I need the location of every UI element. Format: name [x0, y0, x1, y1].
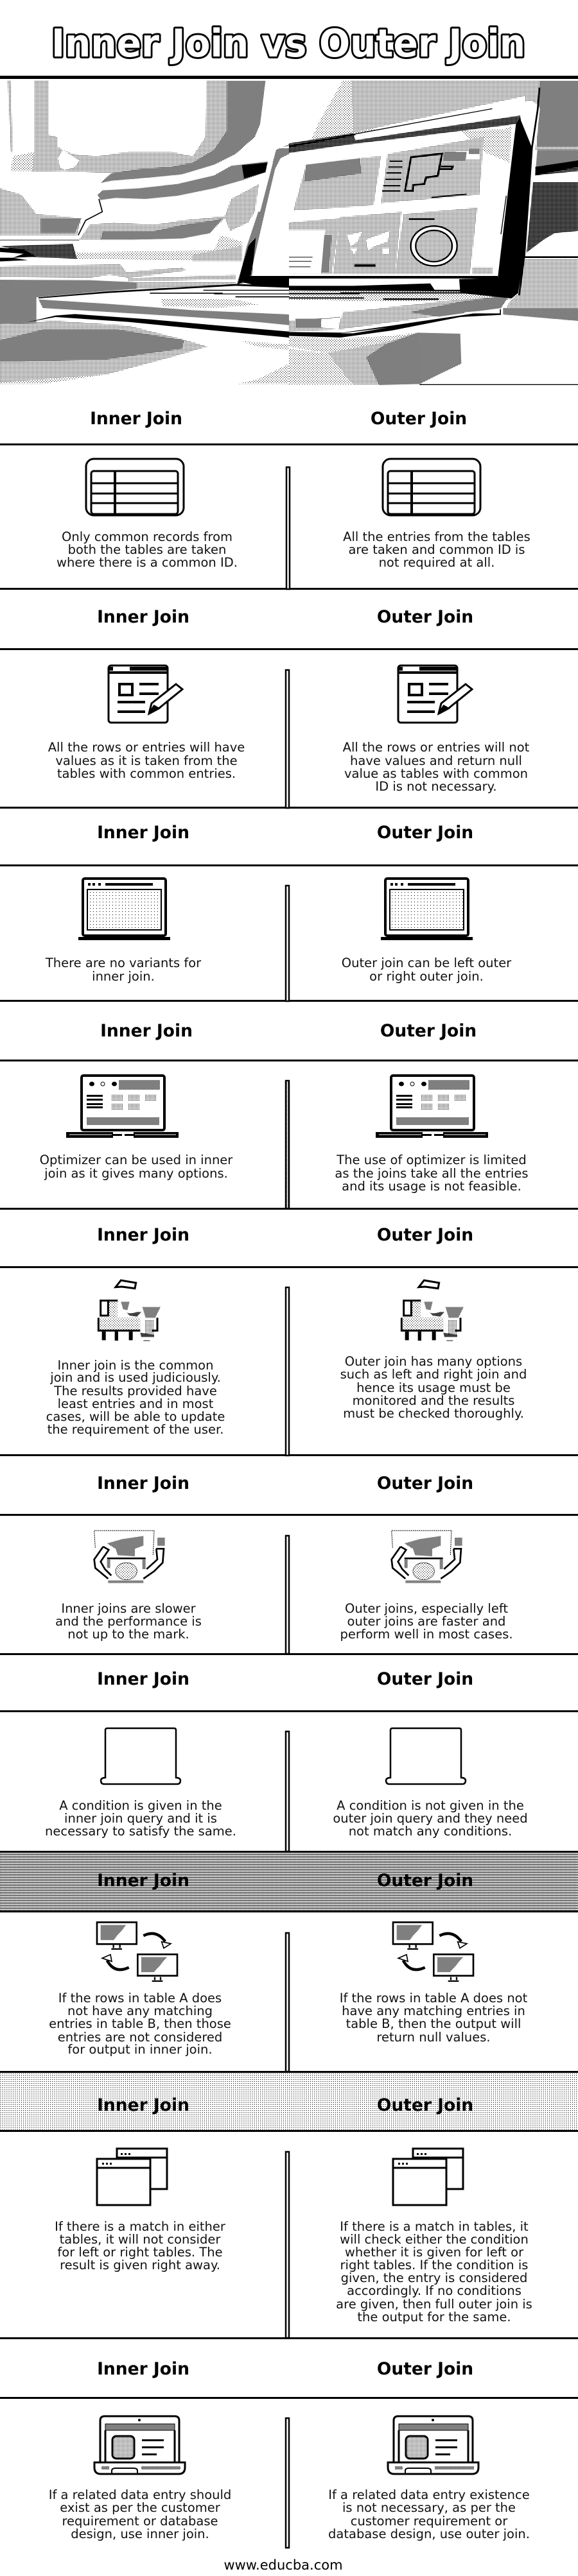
text: outer — [340, 1601, 513, 1642]
title rule — [0, 76, 578, 79]
text: outer: whether it is given for left or — [345, 2245, 524, 2260]
text: inner — [48, 740, 245, 781]
text: outer: hence its usage must be — [356, 1380, 511, 1395]
icon: monitors exchanging data — [393, 1922, 473, 1981]
text: outer — [340, 1354, 527, 1421]
heading: Inner Join: Inner Join — [100, 1021, 193, 1041]
icon: empty laptop outline — [386, 1728, 466, 1784]
icon: person on couch — [401, 1280, 464, 1341]
heading: Outer Join: Outer Join — [377, 1669, 473, 1689]
icon: monitors exchanging data — [97, 1922, 177, 1981]
text: inner: Inner join is the common — [58, 1358, 213, 1373]
icon: overlapping windows — [97, 2149, 167, 2205]
row 3 — [45, 823, 512, 984]
text: outer: Outer join can be left outer — [342, 956, 512, 970]
text: inner: both the tables are taken — [68, 542, 226, 557]
text: outer: Outer join has many options — [345, 1354, 522, 1369]
text: inner: for left or right tables. The — [57, 2245, 223, 2260]
text: inner: necessary to satisfy the same. — [45, 1824, 236, 1839]
icon: person on couch — [98, 1280, 161, 1341]
heading: Inner Join: Inner Join — [90, 409, 182, 429]
text: outer: If there is a match in tables, it — [340, 2219, 529, 2234]
text: inner: If a related data entry should — [49, 2487, 231, 2502]
text: inner: Only common records from — [62, 529, 232, 544]
text: outer: as the joins take all the entries — [335, 1166, 529, 1181]
text: inner: Optimizer can be used in inner — [40, 1153, 233, 1167]
text: outer: have values and return null — [350, 753, 522, 768]
text: outer: If a related data entry existence — [328, 2487, 530, 2502]
text: outer: given, the entry is considered — [341, 2271, 527, 2285]
text: outer: ID is not necessary. — [375, 779, 497, 794]
text: inner: join and is used judiciously. — [49, 1370, 221, 1385]
text: inner: entries in table B, then those — [49, 2016, 231, 2031]
text: outer: are taken and common ID is — [348, 542, 525, 557]
text: outer: will check either the condition — [340, 2232, 529, 2247]
title: Inner Join vs Outer Join — [51, 21, 525, 66]
row 5 — [46, 1225, 527, 1437]
photo right half — [276, 81, 578, 385]
text: inner: All the rows or entries will have — [48, 740, 245, 755]
text: outer: A condition is not given in the — [337, 1798, 524, 1813]
text: outer — [333, 1798, 528, 1839]
row 4 — [40, 1021, 529, 1194]
text: inner: and the performance is — [55, 1614, 202, 1629]
text: outer — [335, 1153, 529, 1194]
text: outer — [343, 529, 530, 570]
text: inner — [49, 1991, 231, 2057]
text: outer: The use of optimizer is limited — [336, 1153, 527, 1167]
text: outer — [340, 1991, 528, 2045]
text: inner: not have any matching — [67, 2004, 213, 2018]
heading: Outer Join: Outer Join — [377, 823, 473, 843]
text: outer: and its usage is not feasible. — [342, 1179, 521, 1194]
icon: laptop with app window — [388, 2416, 478, 2474]
text: outer: must be checked thoroughly. — [343, 1406, 524, 1421]
text: inner: result is given right away. — [60, 2258, 220, 2272]
heading: Inner Join: Inner Join — [97, 2359, 189, 2379]
text: outer: or right outer join. — [369, 969, 484, 984]
text: outer — [336, 2219, 532, 2324]
text: outer: All the rows or entries will not — [343, 740, 530, 755]
column dividers — [286, 467, 290, 2548]
heading: Inner Join: Inner Join — [97, 1473, 189, 1493]
photo left half — [0, 81, 289, 384]
icon: form and pencil — [109, 665, 182, 723]
text: inner: for output in inner join. — [67, 2042, 213, 2057]
text: outer — [342, 956, 512, 984]
icon: hands typing — [392, 1531, 462, 1583]
text: outer: return null values. — [376, 2030, 491, 2045]
text: outer: outer joins are faster and — [347, 1614, 505, 1629]
footer url: www.educba.com — [223, 2557, 343, 2573]
text: inner: exist as per the customer — [60, 2500, 221, 2515]
text: outer: If the rows in table A does not — [340, 1991, 528, 2005]
text: outer: perform well in most cases. — [340, 1627, 513, 1642]
text: inner — [40, 1153, 233, 1181]
text: inner: tables, it will not consider — [60, 2232, 221, 2247]
text: inner: entries are not considered — [58, 2030, 222, 2045]
heading: Outer Join: Outer Join — [377, 1473, 473, 1493]
heading: Inner Join: Inner Join — [97, 607, 189, 627]
icon: laptop — [381, 879, 473, 940]
text: outer: have any matching entries in — [342, 2004, 525, 2018]
icon: overlapping windows — [393, 2149, 463, 2205]
text: inner — [55, 2219, 226, 2272]
text: outer: the output for the same. — [357, 2310, 511, 2324]
text: outer: table B, then the output will — [346, 2016, 521, 2031]
text: outer — [328, 2487, 530, 2541]
heading: Outer Join: Outer Join — [377, 1225, 473, 1245]
text: outer: right tables. If the condition is — [340, 2258, 528, 2272]
text: inner — [46, 1358, 225, 1437]
section rules — [0, 443, 578, 2399]
text: outer: database design, use outer join. — [328, 2527, 530, 2541]
row 9 — [55, 2095, 532, 2324]
text: inner — [49, 2487, 231, 2541]
icon: table — [383, 459, 480, 515]
text: outer: outer join query and they need — [333, 1811, 528, 1826]
heading: Outer Join: Outer Join — [377, 1871, 473, 1891]
icon: laptop with app window — [94, 2416, 185, 2474]
shaded header band — [0, 1851, 578, 1912]
icon: hands typing — [94, 1531, 165, 1583]
text: inner: values as it is taken from the — [55, 753, 238, 768]
text: inner: requirement or database — [62, 2514, 218, 2529]
row 6 — [55, 1473, 513, 1642]
text: inner: cases, will be able to update — [46, 1409, 225, 1424]
text: outer: is not necessary, as per the — [342, 2500, 516, 2515]
text: inner: design, use inner join. — [71, 2527, 209, 2541]
text: inner: the requirement of the user. — [48, 1422, 223, 1437]
heading: Inner Join: Inner Join — [97, 1871, 189, 1891]
row 8 — [49, 1871, 528, 2057]
photo: laptop on a desk — [0, 81, 578, 385]
text: inner — [45, 1798, 236, 1839]
text: inner: inner join query and it is — [64, 1811, 217, 1826]
text: inner: least entries and in most — [58, 1396, 214, 1411]
text: outer: monitored and the results — [353, 1393, 514, 1408]
row 7 — [45, 1669, 528, 1839]
heading: Outer Join: Outer Join — [377, 607, 473, 627]
text: inner: If there is a match in either — [55, 2219, 226, 2234]
text: inner: join as it gives many options. — [44, 1166, 228, 1181]
row 10 — [49, 2359, 530, 2541]
heading: Inner Join: Inner Join — [97, 1225, 189, 1245]
text: inner: where there is a common ID. — [57, 555, 238, 570]
text: inner — [45, 956, 202, 984]
heading: Inner Join: Inner Join — [97, 2095, 189, 2115]
icon: form and pencil — [398, 665, 472, 723]
row 2 — [48, 607, 530, 794]
text: outer: value as tables with common — [344, 766, 528, 781]
icon: laptop dashboard — [66, 1076, 179, 1138]
heading: Inner Join: Inner Join — [97, 823, 189, 843]
heading: Outer Join: Outer Join — [371, 409, 467, 429]
text: inner: If the rows in table A does — [58, 1991, 222, 2005]
text: outer: such as left and right join and — [340, 1367, 527, 1382]
text: inner: A condition is given in the — [59, 1798, 222, 1813]
text: inner: There are no variants for — [45, 956, 202, 970]
text: inner: Inner joins are slower — [61, 1601, 197, 1616]
text: outer: accordingly. If no conditions — [347, 2283, 521, 2298]
row 1 — [57, 409, 530, 570]
heading: Outer Join: Outer Join — [377, 2095, 473, 2115]
text: inner: tables with common entries. — [57, 766, 236, 781]
text: outer — [343, 740, 530, 794]
text: outer: not required at all. — [379, 555, 495, 570]
text: outer: customer requirement or — [351, 2514, 508, 2529]
text: outer: not match any conditions. — [349, 1824, 512, 1839]
text: inner: The results provided have — [53, 1384, 217, 1398]
icon: laptop — [78, 879, 170, 940]
heading: Inner Join: Inner Join — [97, 1669, 189, 1689]
text: inner — [57, 529, 238, 570]
text: outer: All the entries from the tables — [343, 529, 530, 544]
text: inner — [55, 1601, 202, 1642]
icon: table — [86, 459, 184, 515]
heading: Outer Join: Outer Join — [380, 1021, 477, 1041]
text: inner: inner join. — [92, 969, 155, 984]
dotted header band — [0, 2071, 578, 2132]
text: outer: are given, then full outer join is — [336, 2297, 532, 2312]
icon: empty laptop outline — [101, 1728, 180, 1784]
icon: laptop dashboard — [376, 1076, 488, 1138]
text: outer: Outer joins, especially left — [345, 1601, 508, 1616]
text: inner: not up to the mark. — [67, 1627, 189, 1642]
heading: Outer Join: Outer Join — [377, 2359, 473, 2379]
